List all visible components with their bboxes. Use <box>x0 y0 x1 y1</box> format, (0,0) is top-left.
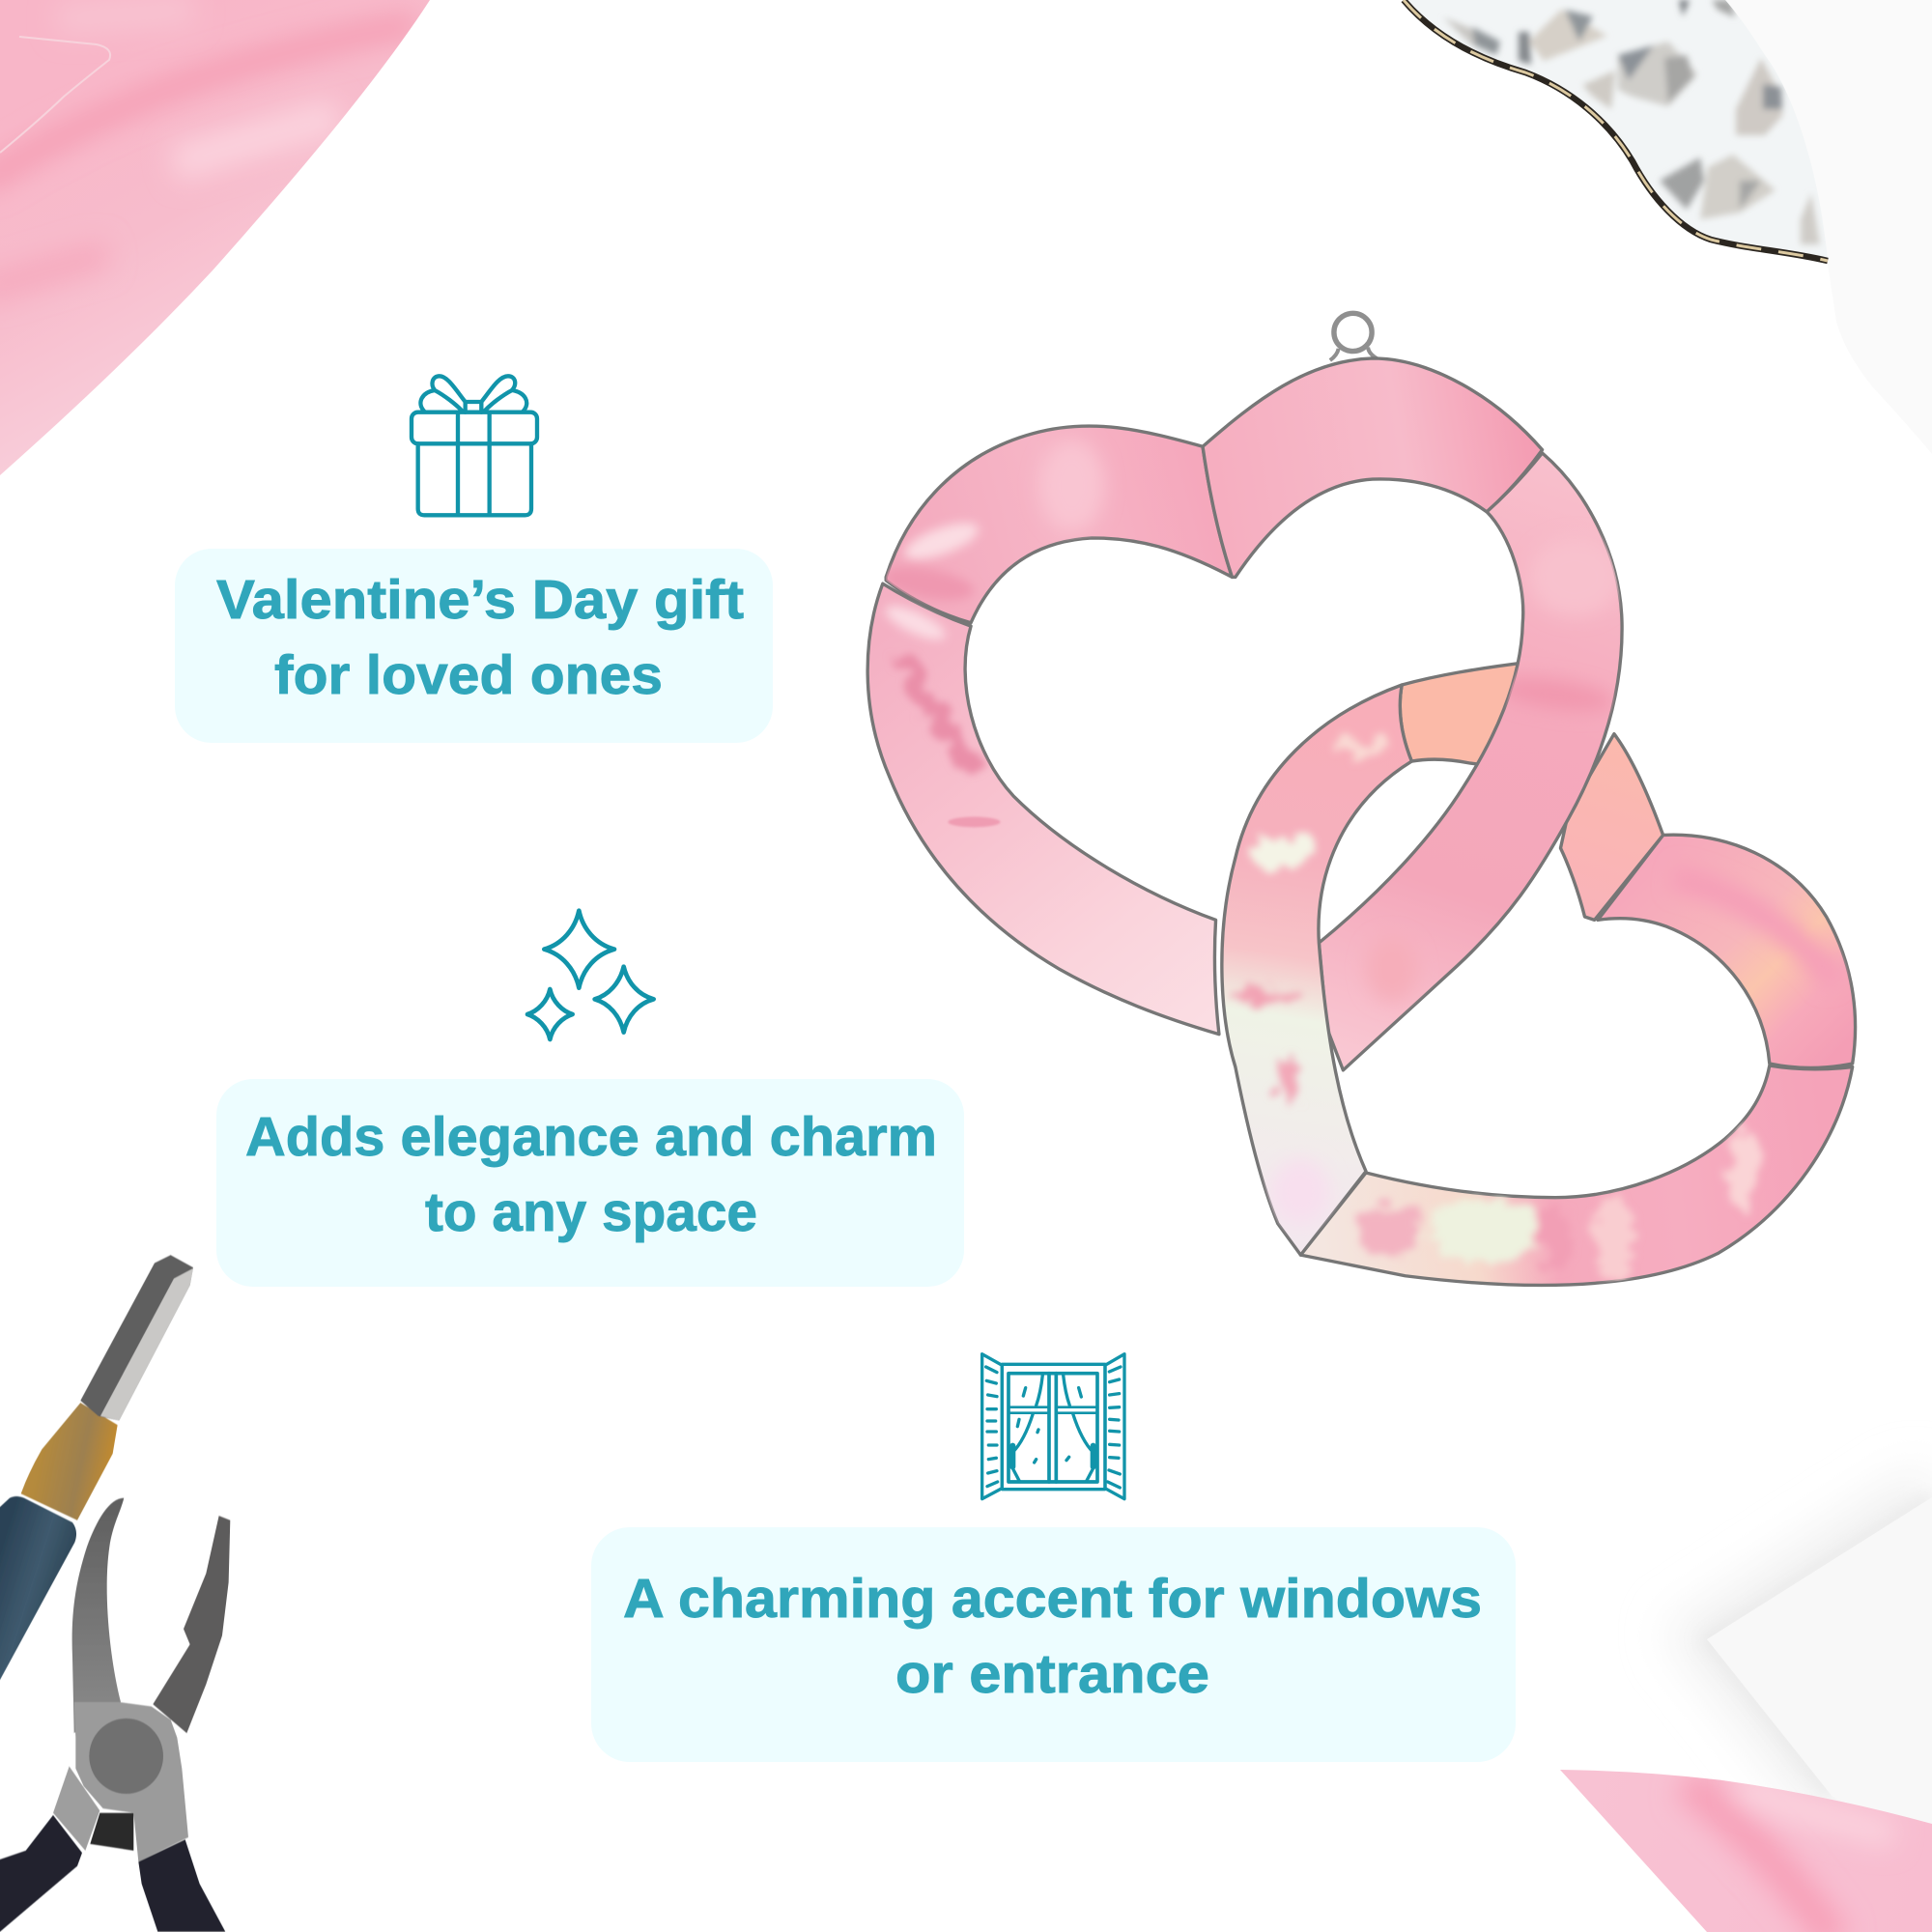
callout background <box>175 549 773 743</box>
glass cutter tool <box>0 1255 193 1680</box>
callout text: Valentine’s Day gift <box>216 569 744 631</box>
panel: elegance message <box>216 911 964 1287</box>
callout background <box>591 1527 1516 1762</box>
panel: gift message <box>175 376 773 743</box>
callout text: Adds elegance and charm <box>245 1106 937 1168</box>
top-right off-white backdrop <box>1711 0 1932 454</box>
top-right textured glass shard <box>1404 0 1828 261</box>
top-left pink glass corner <box>0 0 430 475</box>
panel: window message <box>591 1354 1516 1762</box>
double heart stained glass suncatcher <box>867 313 1856 1286</box>
big heart: right band segment <box>1319 453 1622 1070</box>
small heart: iridescent left segment <box>1222 685 1411 1255</box>
big heart: top segment <box>1203 358 1543 577</box>
small heart: lower right segment <box>1300 1065 1853 1286</box>
callout text <box>245 1106 937 1243</box>
icon: sparkles <box>527 911 654 1039</box>
callout text <box>623 1568 1482 1705</box>
small heart: neck segment <box>1560 734 1663 920</box>
hanging ring <box>1330 313 1378 360</box>
pliers tool <box>0 1498 230 1932</box>
bottom-right pink glass corner <box>1560 1770 1932 1932</box>
small heart: peach segment <box>1400 662 1529 766</box>
callout text: to any space <box>425 1181 757 1243</box>
icon: window with shutters <box>982 1354 1124 1499</box>
big heart: lower left segment <box>867 583 1219 1035</box>
small heart: right lobe segment <box>1598 835 1856 1067</box>
callout text <box>216 569 744 706</box>
callout text: for loved ones <box>274 644 663 706</box>
bottom-right off-white backdrop with soft shadow <box>1700 1488 1932 1835</box>
callout text: or entrance <box>895 1643 1209 1705</box>
callout background <box>216 1079 964 1287</box>
callout text: A charming accent for windows <box>623 1568 1482 1630</box>
big heart: upper left segment <box>881 426 1232 623</box>
icon: gift box <box>412 376 537 515</box>
